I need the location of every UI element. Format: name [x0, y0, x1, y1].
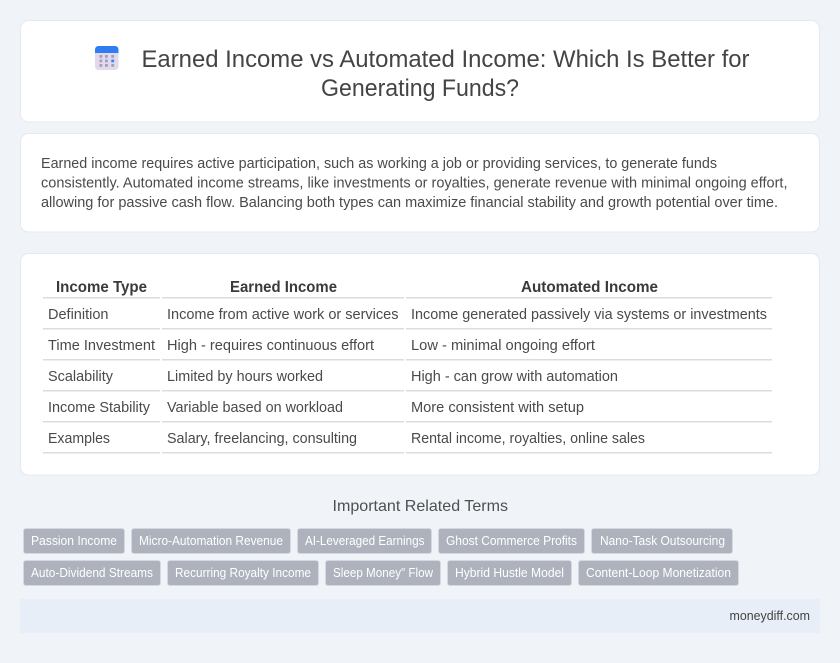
- table header row: Income Type: [56, 279, 147, 296]
- tag: Passion Income: Passion Income: [31, 534, 117, 548]
- tag: Nano-Task Outsourcing: Nano-Task Outsourcing: [600, 534, 725, 548]
- table row: scalability: [43, 369, 772, 392]
- table header row: Automated Income: [521, 279, 658, 296]
- tag: Nano-Task Outsourcing: [592, 528, 732, 554]
- text block: description: consistently. Automated income streams, like investments or royalties, generate revenue with minimal ongoing effort,: [41, 176, 788, 192]
- tag: AI-Leveraged Earnings: AI-Leveraged Earnings: [305, 534, 424, 548]
- tag: Sleep Money Flow: [326, 560, 440, 586]
- tag: Sleep Money Flow: Sleep Money" Flow: [333, 566, 434, 580]
- tag: Content-Loop Monetization: Content-Loop Monetization: [586, 566, 731, 580]
- title: Generating Funds?: [321, 75, 519, 102]
- table row: examples: Salary, freelancing, consulting: [167, 431, 357, 447]
- tag: Passion Income: [24, 528, 124, 554]
- related term tags: [24, 528, 738, 586]
- tag: Recurring Royalty Income: Recurring Royalty Income: [175, 566, 311, 580]
- title: [142, 46, 750, 102]
- table row: examples: Examples: [48, 431, 110, 447]
- tag: Micro-Automation Revenue: Micro-Automation Revenue: [139, 534, 283, 548]
- icon: calendar: [95, 46, 118, 70]
- table row: time investment: High - requires continuous effort: [167, 338, 374, 354]
- footer: site name: moneydiff.com: [730, 609, 810, 623]
- table row: scalability: Scalability: [48, 369, 114, 385]
- table row: income stability: Variable based on workload: [167, 400, 343, 416]
- tag: Ghost Commerce Profits: Ghost Commerce Profits: [446, 534, 577, 548]
- footer bar: [20, 599, 820, 633]
- table row: time investment: Time Investment: [48, 338, 155, 354]
- table header row: [43, 279, 772, 298]
- table row: definition: Income generated passively via systems or investments: [411, 307, 767, 323]
- tag: Recurring Royalty Income: [168, 560, 318, 586]
- panel: description: [20, 134, 820, 232]
- tag: Micro-Automation Revenue: [132, 528, 290, 554]
- table row: income stability: Income Stability: [48, 400, 151, 416]
- heading: related terms: Important Related Terms: [332, 498, 508, 515]
- table row: income stability: More consistent with setup: [411, 400, 584, 416]
- table row: definition: Income from active work or services: [167, 307, 398, 323]
- panel: title header: [20, 20, 820, 122]
- table row: scalability: Limited by hours worked: [167, 369, 323, 385]
- table row: examples: [43, 431, 772, 454]
- text block: description: Earned income requires active participation, such as working a job or providing services, to generate funds: [41, 156, 717, 172]
- panel: comparison table: [20, 254, 820, 475]
- table row: definition: [43, 307, 772, 330]
- table row: scalability: High - can grow with automation: [411, 369, 618, 385]
- title: Earned Income vs Automated Income: Which Is Better for: [142, 46, 750, 73]
- tag: Ghost Commerce Profits: [438, 528, 584, 554]
- tag: Auto-Dividend Streams: [24, 560, 160, 586]
- table row: examples: Rental income, royalties, online sales: [411, 431, 645, 447]
- tag: Auto-Dividend Streams: Auto-Dividend Streams: [31, 566, 153, 580]
- table row: definition: Definition: [48, 307, 108, 323]
- tag: Hybrid Hustle Model: [448, 560, 572, 586]
- text block: description: allowing for passive cash flow. Balancing both types can maximize financial stability and growth potential over time.: [41, 195, 778, 211]
- text block: description: [41, 156, 788, 211]
- table row: time investment: [43, 338, 772, 360]
- table header row: Earned Income: [230, 279, 337, 296]
- table row: time investment: Low - minimal ongoing effort: [411, 338, 595, 354]
- tag: Hybrid Hustle Model: Hybrid Hustle Model: [455, 566, 564, 580]
- tag: AI-Leveraged Earnings: [298, 528, 432, 554]
- tag: Content-Loop Monetization: [578, 560, 738, 586]
- table row: income stability: [43, 400, 772, 422]
